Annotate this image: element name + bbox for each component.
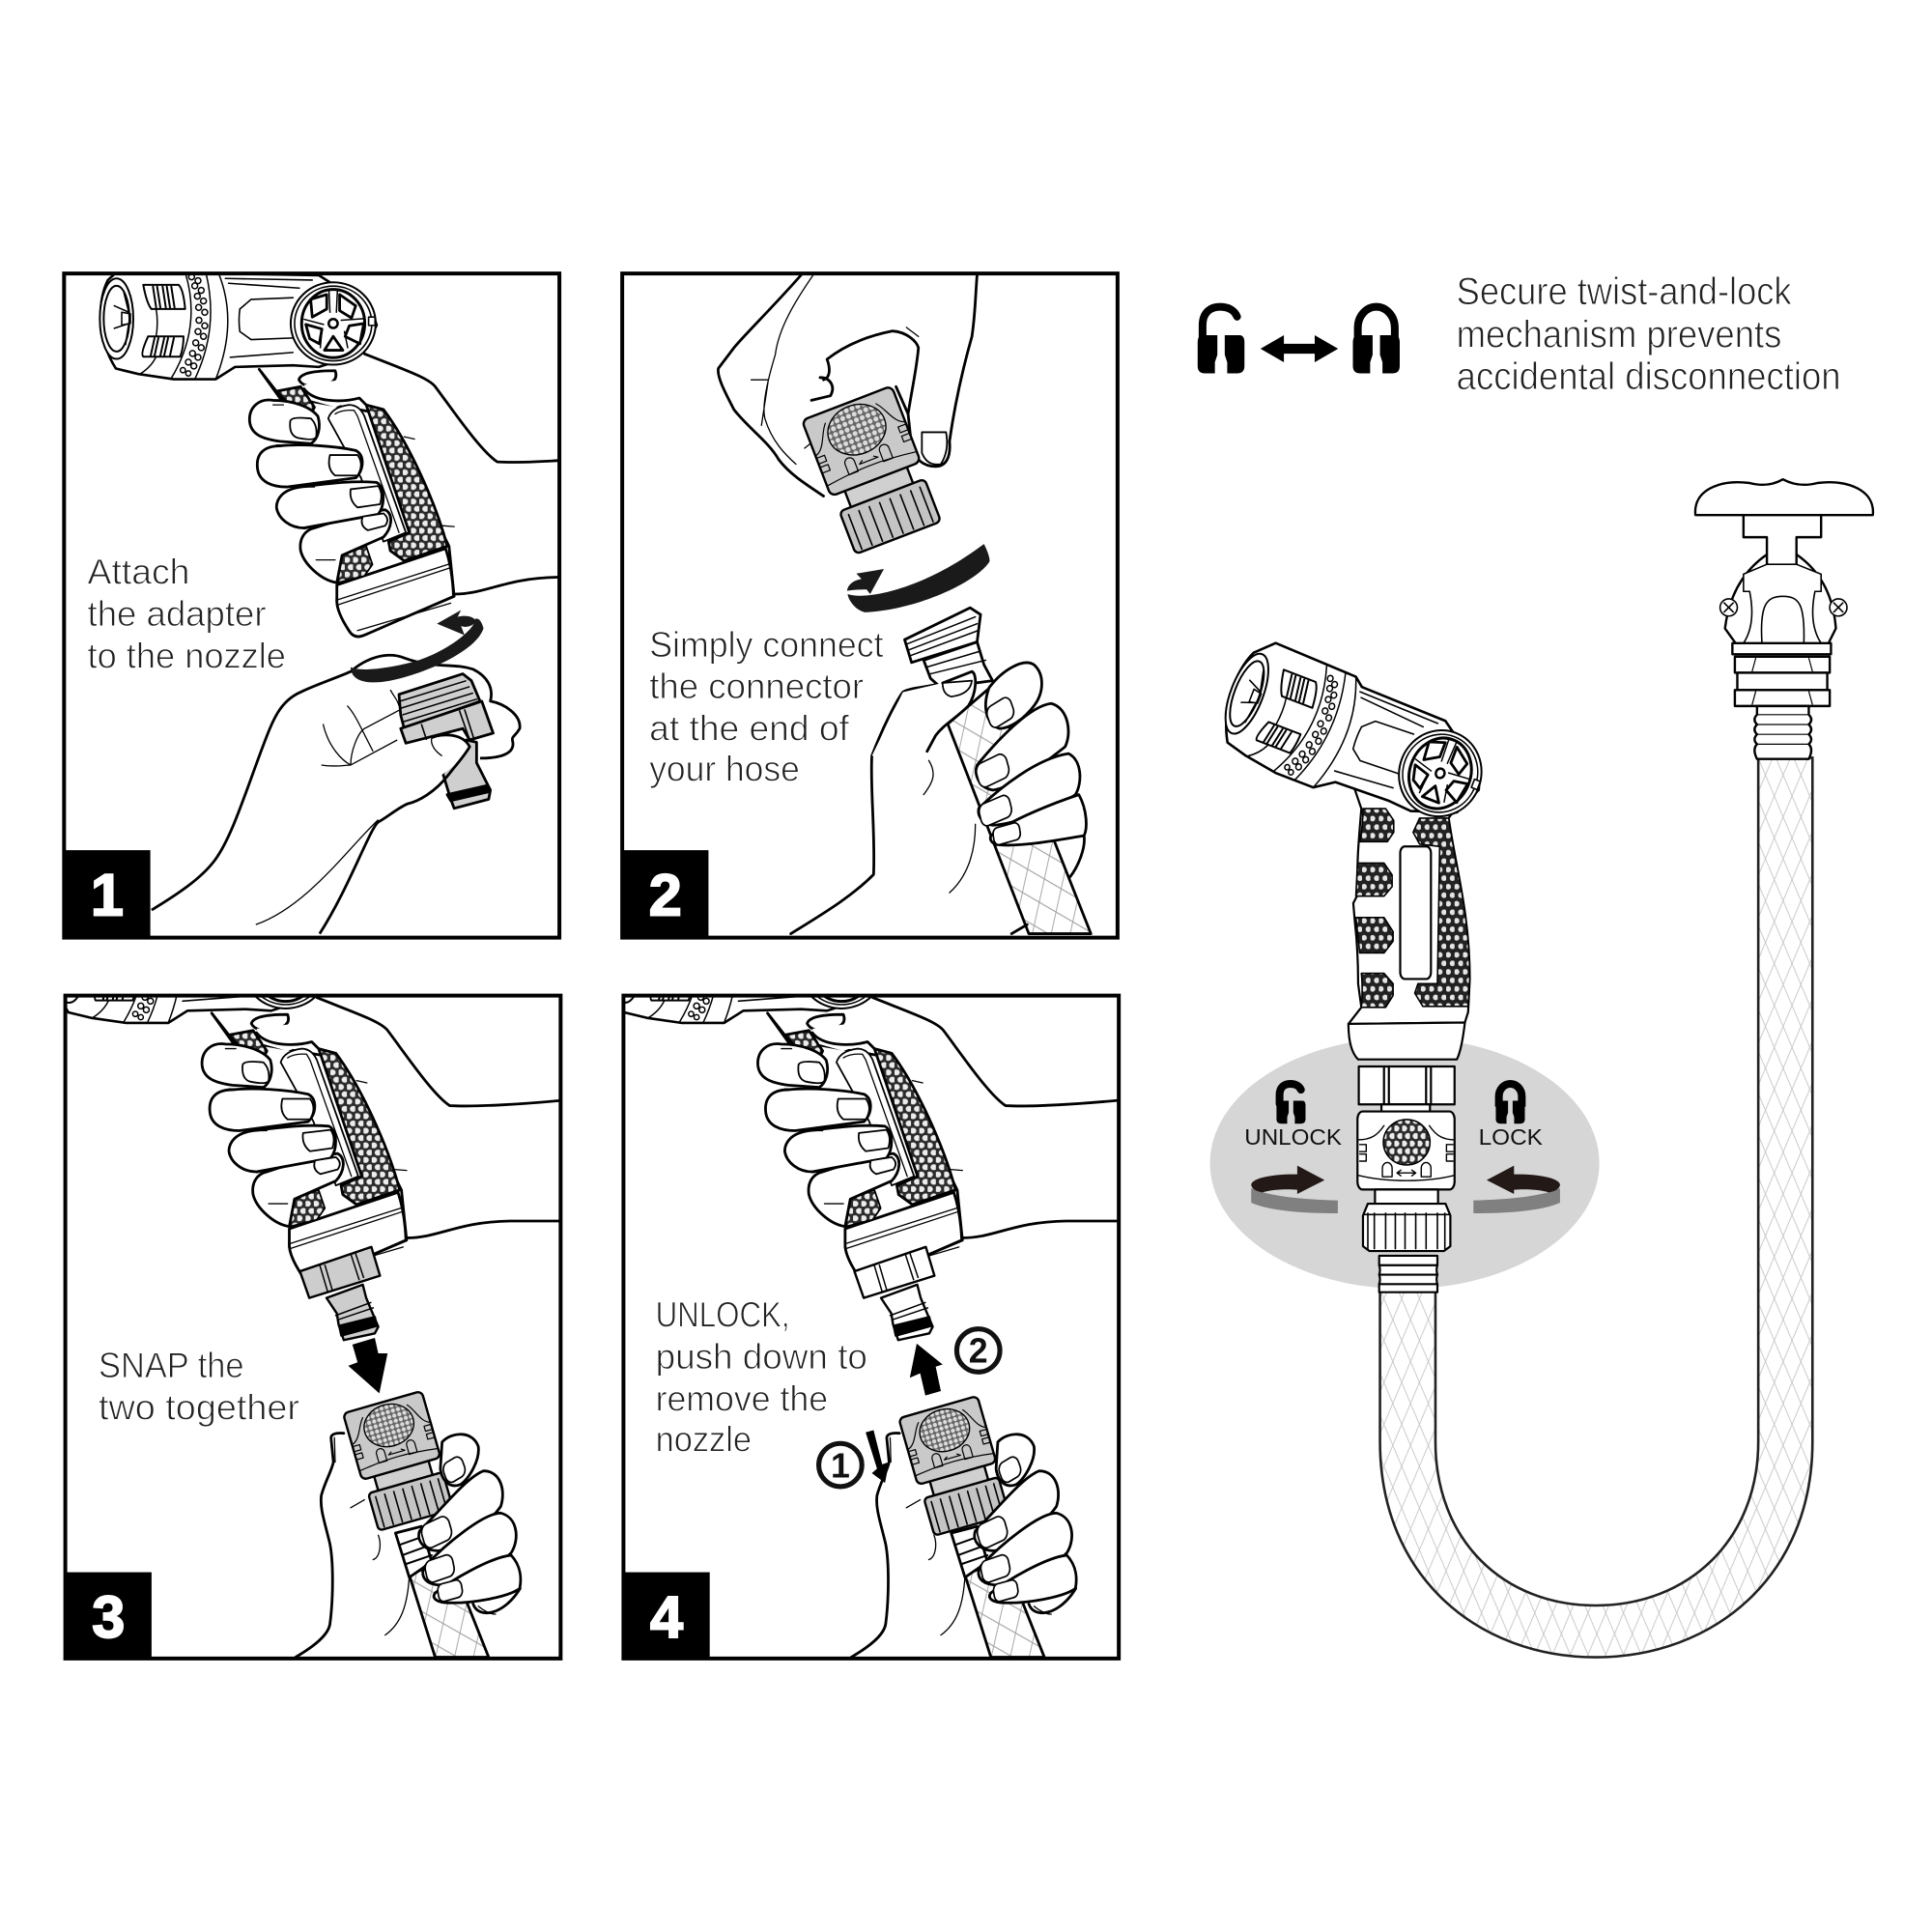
step text: the adapter	[88, 594, 267, 634]
handle window	[1400, 846, 1431, 979]
adapter	[1359, 1066, 1455, 1104]
panel frame 1	[64, 273, 559, 938]
icon: closed lock	[1353, 307, 1400, 373]
hand holding hose	[296, 1434, 520, 1658]
connector collar	[1363, 1204, 1450, 1251]
faucet and hose assembly	[1209, 479, 1873, 1658]
connector	[343, 1391, 455, 1531]
description text	[1457, 270, 1841, 398]
step text: SNAP the	[99, 1346, 244, 1385]
adapter on nozzle	[300, 1247, 380, 1340]
faucet handle	[1695, 479, 1873, 515]
step text: the connector	[649, 667, 864, 706]
step number badge 2	[622, 850, 708, 938]
faucet body	[1725, 554, 1836, 645]
step text: push down to	[656, 1337, 867, 1377]
braided hose	[1380, 757, 1812, 1658]
spray nozzle handle with connector	[1349, 781, 1469, 1293]
snap arrow	[349, 1338, 387, 1393]
unlock icon and label: UNLOCK	[1244, 1124, 1343, 1150]
illustration: hands, nozzle and adapter	[99, 264, 625, 934]
circled number 2	[956, 1329, 1000, 1372]
hand holding hose	[851, 1434, 1076, 1658]
step number badge 4	[623, 1573, 710, 1659]
faucet	[1695, 479, 1873, 759]
adapter on nozzle	[854, 1247, 934, 1340]
icon: double arrow	[1261, 335, 1338, 362]
panel: step 3 snap together	[64, 993, 562, 1661]
step text	[649, 625, 884, 789]
upper hand	[718, 275, 977, 497]
circled number 1	[819, 1443, 862, 1487]
description text: accidental disconnection	[1457, 355, 1841, 398]
step text: Simply connect	[649, 625, 884, 665]
faucet screws	[1720, 599, 1847, 616]
step number badge 1: 1	[91, 863, 124, 928]
grip texture	[1356, 809, 1469, 1008]
step number badge 3	[66, 1573, 152, 1659]
faucet stem	[1744, 515, 1821, 567]
circled number 1: 1	[831, 1446, 850, 1485]
panel: step 2 connect to hose	[622, 273, 1118, 938]
icon: unlock to lock	[1198, 307, 1400, 373]
nozzle base	[1349, 1022, 1464, 1060]
lock icon and label: LOCK	[1479, 1124, 1544, 1150]
step number badge 4: 4	[650, 1584, 683, 1650]
gray lock highlight ellipse	[1210, 1037, 1600, 1289]
fingers	[419, 1435, 521, 1603]
step number badge 3: 3	[92, 1584, 125, 1650]
circled number 2: 2	[969, 1332, 988, 1371]
arrow down	[866, 1430, 889, 1483]
step text: at the end of	[649, 709, 850, 749]
twist arrow	[847, 544, 989, 612]
hose fitting	[1379, 1256, 1437, 1293]
lock icon and label	[1479, 1084, 1544, 1150]
pipe fittings	[1732, 643, 1831, 759]
connector	[898, 1396, 1011, 1536]
step text: to the nozzle	[88, 636, 286, 675]
panel: step 4 unlock and remove	[621, 993, 1121, 1661]
description text: Secure twist-and-lock	[1457, 270, 1792, 313]
nozzle handle	[1349, 781, 1469, 1024]
arrow: lock rotation	[1473, 1166, 1560, 1213]
step text: your hose	[649, 750, 800, 789]
icon: open lock	[1198, 307, 1244, 373]
step text: UNLOCK,	[656, 1295, 790, 1335]
illustration: hands, connector and hose end	[718, 275, 1091, 934]
step text: Attach	[88, 553, 189, 592]
connector	[1357, 1104, 1455, 1204]
step text	[656, 1295, 867, 1460]
lower hand, adapter and twist arrow	[152, 611, 520, 934]
illustration: unlocking and removing nozzle	[608, 908, 1133, 1658]
lower hand holding hose	[791, 608, 1091, 934]
step text: nozzle	[656, 1420, 752, 1460]
illustration: nozzle moving into connector	[68, 997, 558, 1657]
unlock icon and label	[1244, 1084, 1343, 1150]
panel frame 4	[623, 996, 1119, 1659]
step text: two together	[99, 1387, 299, 1427]
step text	[99, 1346, 299, 1427]
description text: mechanism prevents	[1457, 314, 1781, 356]
arrow up	[910, 1344, 943, 1396]
step number badge 1	[64, 850, 151, 938]
nozzle held in hand	[52, 908, 578, 1280]
panel frame 2	[622, 273, 1118, 938]
nozzle held in hand	[99, 264, 625, 637]
panel frame 3	[66, 996, 560, 1659]
step number badge 2: 2	[649, 863, 682, 928]
panel: step 1 attach adapter	[64, 264, 625, 938]
connector with lock label	[802, 386, 943, 554]
step text	[88, 553, 286, 675]
spray nozzle head with wheel	[1209, 634, 1502, 843]
fingers	[975, 1435, 1076, 1603]
step text: remove the	[656, 1378, 828, 1418]
faucet hex nut	[1744, 564, 1821, 643]
arrow: unlock rotation	[1251, 1166, 1338, 1213]
nozzle held in hand	[608, 908, 1133, 1280]
